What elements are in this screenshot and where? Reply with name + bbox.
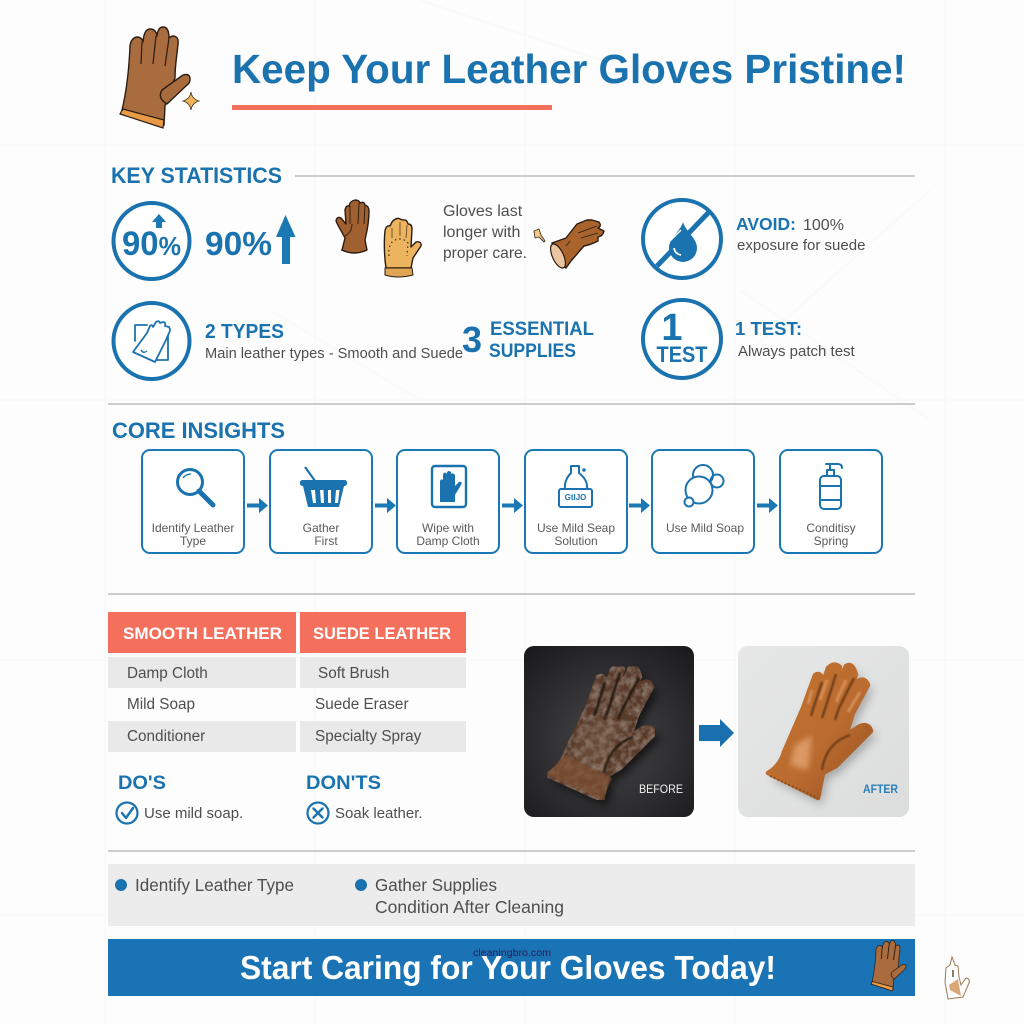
photo: before glove [524, 646, 694, 817]
don'ts [306, 773, 423, 824]
icon: brown glove [336, 200, 369, 253]
don'ts: DON'TS [306, 773, 381, 794]
table: suede leather: Soft Brush [318, 665, 389, 682]
photo: before glove: BEFORE [639, 782, 683, 796]
step 4: use mild soap solution [525, 450, 627, 553]
stat: 90% circle badge: 90% [122, 225, 181, 263]
banner: call to action: Start Caring for Your Gloves Today! [240, 949, 776, 986]
stat text: gloves last longer [443, 203, 527, 262]
stat: 3 essential supplies: ESSENTIAL [490, 319, 594, 340]
do's: Use mild soap. [144, 805, 243, 822]
step 5: use mild soap [652, 450, 754, 553]
stat: 90% circle badge [114, 203, 190, 279]
stat: 3 essential supplies [462, 319, 594, 362]
table: suede leather: Specialty Spray [315, 728, 422, 745]
icon: tan stitched glove [384, 218, 421, 277]
icon: header leather glove with sparkle [120, 27, 199, 128]
banner: call to action [108, 939, 915, 996]
step 4: use mild soap solution: Solution [554, 534, 598, 548]
step 6: condition spring [780, 450, 882, 553]
step 1: identify leather type: Identify Leather [152, 521, 234, 535]
arrow [757, 498, 778, 513]
stat text: avoid [736, 214, 865, 254]
photo: after glove [738, 646, 909, 817]
stat: 3 essential supplies: 3 [462, 319, 482, 360]
stat text: 2 types [205, 321, 463, 362]
panel: key takeaways [108, 864, 915, 926]
step 2: gather first [270, 450, 372, 553]
stat text: 2 types: Main leather types - Smooth and Suede [205, 346, 463, 362]
stat text: gloves last longer: longer with [443, 224, 520, 241]
step 1: identify leather type [142, 450, 244, 553]
step 5: use mild soap: Use Mild Soap [666, 521, 744, 535]
stat: 90% with up arrow [205, 215, 296, 264]
stat text: gloves last longer: Gloves last [443, 203, 523, 220]
stat: 90% with up arrow: 90% [205, 226, 272, 263]
stat text: gloves last longer: proper care. [443, 245, 527, 262]
step 6: condition spring: Conditisy [806, 521, 856, 535]
icon: glove lying on side with sparkle [534, 220, 604, 270]
arrow [629, 498, 650, 513]
stat: 3 essential supplies: SUPPLIES [489, 341, 576, 362]
don'ts: Soak leather. [335, 805, 423, 822]
do's: DO'S [118, 773, 166, 794]
stat text: avoid: exposure for suede [737, 237, 865, 254]
step 3: wipe with damp cloth [397, 450, 499, 553]
photo: after glove: AFTER [863, 784, 899, 796]
table: suede leather [300, 612, 466, 752]
stat text: 1 test: 1 TEST: [735, 319, 802, 339]
step 2: gather first: Gather [303, 521, 339, 535]
step 6: condition spring: Spring [814, 534, 848, 548]
table: smooth leather: Mild Soap [127, 696, 195, 713]
step 1: identify leather type: Type [180, 534, 206, 548]
step 3: wipe with damp cloth: Wipe with [422, 521, 474, 535]
table: smooth leather: Conditioner [127, 728, 205, 745]
stat: 2 types icon [114, 303, 190, 379]
stat text: avoid: 100% [803, 217, 844, 234]
stat text: 1 test: Always patch test [738, 343, 856, 360]
arrow [502, 498, 523, 513]
step 4: use mild soap solution: GtIJO [565, 493, 586, 502]
icon: outlined watermark glove [945, 957, 969, 999]
heading: core insights: CORE INSIGHTS [112, 418, 285, 443]
panel: key takeaways: Identify Leather Type [135, 875, 294, 895]
stat text: 1 test [735, 319, 856, 360]
table: smooth leather: Damp Cloth [127, 665, 208, 682]
step 2: gather first: First [314, 534, 338, 548]
arrow [247, 498, 268, 513]
table: smooth leather: SMOOTH LEATHER [123, 625, 282, 643]
stat: 1 test badge: 1 [661, 307, 683, 349]
title: Keep Your Leather Gloves Pristine! [232, 46, 906, 92]
title underline [232, 105, 552, 110]
do's [116, 773, 243, 824]
stat: 1 test badge [643, 300, 721, 378]
table: smooth leather [108, 612, 296, 752]
panel: key takeaways: Condition After Cleaning [375, 897, 564, 917]
step 4: use mild soap solution: Use Mild Seap [537, 521, 615, 535]
arrow [375, 498, 396, 513]
table: suede leather: Suede Eraser [315, 696, 409, 713]
stat text: avoid: AVOID: [736, 214, 796, 234]
panel: key takeaways: Gather Supplies [375, 875, 497, 895]
stat text: 2 types: 2 TYPES [205, 321, 284, 343]
banner: call to action: cleaningbro.com [473, 947, 551, 959]
table: suede leather: SUEDE LEATHER [313, 625, 451, 643]
arrow: before to after [699, 719, 734, 747]
stat: 1 test badge: TEST [656, 342, 708, 367]
heading: key statistics: KEY STATISTICS [111, 163, 282, 188]
icon: no water drop [643, 200, 721, 278]
step 3: wipe with damp cloth: Damp Cloth [416, 534, 480, 548]
